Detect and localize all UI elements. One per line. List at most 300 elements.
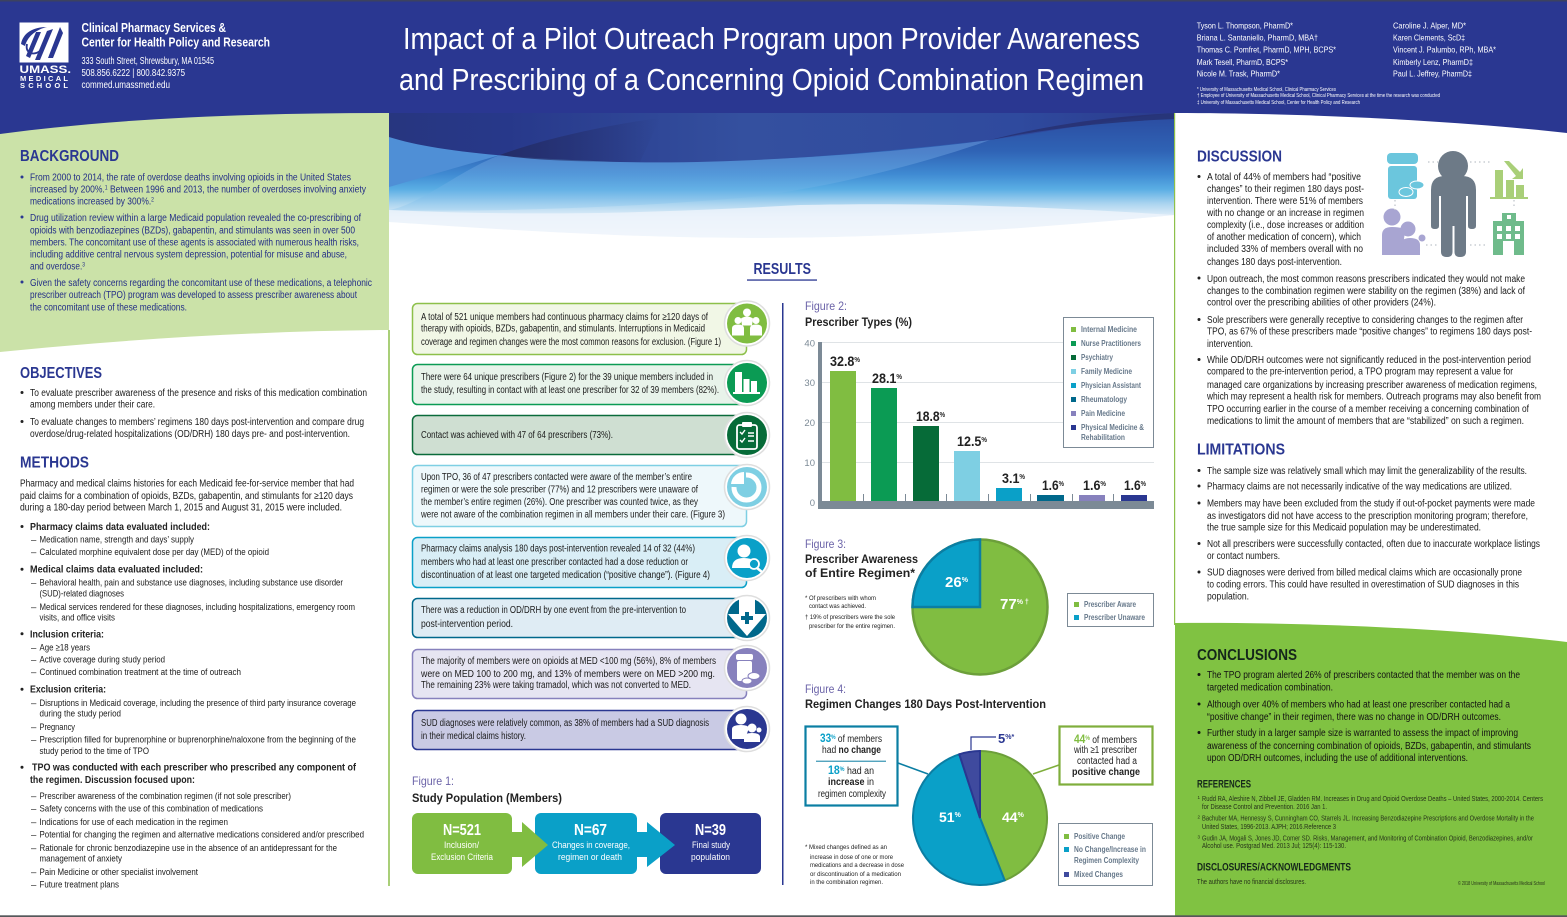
pie chart: 26 (945, 574, 962, 591)
figure 3 footnotes: * Of prescribers with whom (805, 595, 876, 602)
callout: no change or increase: of members (836, 734, 882, 745)
discussion bullets: changes 180 days post-intervention. (1207, 257, 1342, 268)
organisation and address: Clinical Pharmacy Services & (82, 21, 226, 35)
TPO discussion list: Future treatment plans (40, 880, 119, 891)
figure 4 footnote: in the combination regimen. (810, 879, 883, 886)
references: 3 (1198, 835, 1200, 840)
icon: pill bottle (724, 646, 770, 690)
methods intro: paid claims for a combination of opioids, BZDs, gabapentin, and stimulants for ≥120 days (20, 491, 353, 502)
authors: Caroline J. Alper, MD* (1393, 20, 1467, 30)
legend: regimen changes: No Change/Increase in (1074, 845, 1146, 854)
authors: † Employee of University of Massachusetts Medical School, Clinical Pharmacy Services at the time the research was conducted (1197, 93, 1440, 99)
flow box: N=67: Changes in coverage, (552, 840, 630, 851)
exclusion criteria list: Prescription filled for buprenorphine or buprenorphine/naloxone from the beginning of the (40, 735, 356, 746)
figure 4 heading (805, 682, 1046, 711)
figure 4 heading: Figure 4: (805, 682, 846, 696)
decorative wave band (389, 113, 1175, 246)
TPO discussion list: Prescriber awareness of the combination regimen (if not sole prescriber) (40, 791, 291, 802)
figure 3 footnotes (805, 595, 895, 630)
flow box: N=521 (412, 813, 548, 874)
discussion bullets: intervention. (1207, 339, 1253, 350)
figure 4 footnote: * Mixed changes defined as an (805, 844, 887, 851)
figure 1 heading (412, 774, 562, 805)
figure 2: prescriber types bar chart (804, 299, 1154, 509)
inclusion criteria list: – (31, 655, 37, 666)
flow box: N=39: Final study (692, 840, 730, 851)
disclosures: DISCLOSURES/ACKNOWLEDGMENTS (1197, 862, 1351, 874)
medical claims list (20, 565, 355, 624)
callout: positive change (1060, 726, 1152, 784)
flow box: N=39: population (691, 852, 730, 863)
TPO discussion list: Potential for changing the regimen and alternative medications considered and/or prescribed (40, 830, 364, 841)
bar value labels: 1.6 (1083, 477, 1102, 493)
background bullets: 2 (151, 198, 155, 204)
legend: prescriber types: Nurse Practitioners (1081, 339, 1141, 348)
TPO discussion list: Indications for use of each medication in the regimen (40, 817, 228, 828)
authors: Paul L. Jeffrey, PharmD‡ (1393, 69, 1472, 79)
discussion bullets: included 33% of members overall with no (1207, 244, 1363, 255)
figure 4 footnote: medications and a decrease in dose (810, 862, 904, 869)
methods intro: during a 180-day period between March 1, 2015 and August 31, 2015 were included. (20, 503, 342, 514)
bars (830, 371, 1147, 501)
exclusion criteria list: Exclusion criteria: (30, 685, 106, 696)
background bullets: 3 (82, 262, 86, 268)
result card 8 (412, 706, 770, 752)
bar value labels: % (1059, 481, 1065, 488)
authors: Karen Clements, ScD‡ (1393, 33, 1465, 43)
title (399, 21, 1144, 97)
limitations bullets: population. (1207, 592, 1249, 603)
callout: no change or increase (806, 726, 898, 806)
inclusion criteria list: Continued combination treatment at the time of outreach (40, 667, 241, 678)
figure 3 footnotes: † 19% of prescribers were the sole (805, 614, 895, 621)
pie chart: 77 (1000, 596, 1017, 613)
background bullets: and overdose. (30, 262, 93, 272)
medical claims list: (SUD)-related diagnoses (40, 589, 124, 600)
legend: prescriber types: Physical Medicine & (1081, 423, 1144, 432)
bar value labels: % (940, 412, 946, 419)
heading: objectives: OBJECTIVES (20, 365, 102, 382)
medical claims list: – (31, 602, 37, 613)
figure 4 footnote: or discontinuation of a medication (810, 871, 901, 878)
figure 2 heading (805, 299, 912, 329)
pie chart: % † (1017, 599, 1029, 606)
bar value labels: % (854, 357, 861, 364)
TPO discussion list: management of anxiety (40, 854, 122, 865)
icon: clipboard (724, 412, 770, 458)
discussion bullets: complexity (i.e., dose increases or addition (1207, 220, 1364, 231)
panel: methods (20, 454, 364, 891)
result card 3 (412, 412, 770, 458)
legend: awareness (1068, 594, 1154, 626)
panel: background (0, 113, 389, 352)
figure 1 heading: Figure 1: (412, 774, 454, 788)
TPO discussion list: – (31, 867, 37, 878)
icon: doctor and patient (724, 706, 770, 752)
objectives bullets: overdose/drug-related hospitalizations (OD/DRH) 180 days pre- and post-intervention. (30, 429, 350, 440)
authors: Vincent J. Palumbo, RPh, MBA* (1393, 45, 1497, 55)
legend: prescriber types: Rheumatology (1081, 395, 1127, 404)
callout: no change or increase: % (840, 767, 845, 773)
figure 3 footnotes: prescriber for the entire regimen. (809, 623, 895, 630)
discussion bullets (1198, 172, 1541, 427)
callout: positive change: of members (1090, 735, 1137, 746)
logo: UMASS. (20, 64, 71, 76)
legend: prescriber types (1064, 318, 1154, 448)
pie chart (913, 751, 1047, 885)
background bullets: increased by 200%. (30, 184, 118, 196)
authors: Tyson L. Thompson, PharmD* (1197, 20, 1294, 30)
TPO discussion list: – (31, 791, 37, 802)
result card 3: Contact was achieved with 47 of 64 prescribers (73%). (421, 430, 613, 441)
figure 4 footnote: increase in dose of one or more (810, 854, 893, 861)
TPO discussion list: Rationale for chronic benzodiazepine use in the absence of an antidepressant for the (40, 843, 337, 854)
result card 1: coverage and regimen changes were the most common reasons for exclusion. (Figure 1) (421, 337, 721, 348)
TPO discussion list: – (31, 830, 37, 841)
callout: no change or increase: had an (845, 766, 874, 777)
objectives bullets: To evaluate prescriber awareness of the presence and risks of this medication combination (30, 388, 367, 399)
limitations bullets (1198, 466, 1540, 603)
exclusion criteria list: – (31, 698, 37, 709)
bar value labels: % (896, 374, 903, 381)
legend: prescriber types: Psychiatry (1081, 353, 1113, 362)
background bullets (20, 172, 372, 314)
exclusion criteria list: study period to the time of TPO (40, 746, 149, 757)
result card 6: post-intervention period. (421, 619, 513, 630)
result card 8: in their medical claims history. (421, 731, 526, 742)
objectives bullets: To evaluate changes to members’ regimens 180 days post-intervention and compare drug (30, 417, 364, 428)
icon: bar chart (724, 360, 770, 406)
TPO discussion list: TPO was conducted with each prescriber who prescribed any component of (32, 763, 357, 774)
pharmacy claims list: – (31, 535, 37, 546)
references: 1 (1198, 795, 1200, 800)
figure 3: prescriber awareness pie (805, 537, 1154, 674)
medical claims list: – (31, 578, 37, 589)
figure 2 heading: Prescriber Types (%) (805, 315, 912, 329)
references: for Disease Control and Prevention. 2016 Jan 1. (1202, 804, 1327, 811)
pharmacy claims list: Pharmacy claims data evaluated included: (30, 522, 210, 533)
heading: conclusions: CONCLUSIONS (1197, 647, 1297, 664)
limitations bullets: Pharmacy claims are not necessarily indicative of the way medications are utilized. (1207, 482, 1512, 493)
authors: Kimberly Lenz, PharmD‡ (1393, 57, 1473, 67)
legend: regimen changes (1058, 824, 1152, 886)
callout: mixed changes (971, 731, 1014, 750)
organisation and address: commed.umassmed.edu (82, 80, 170, 91)
pie chart: % (955, 812, 962, 819)
result card 2: the study, resulting in contact with at least one prescriber for 32 of 39 members (82%). (421, 385, 719, 396)
authors: * University of Massachusetts Medical School, Clinical Pharmacy Services (1197, 87, 1336, 93)
references: REFERENCES (1197, 779, 1251, 791)
references: 2 (1198, 815, 1200, 820)
result card 1 (412, 301, 770, 354)
callout: no change or increase: had no change (822, 745, 881, 756)
limitations bullets: the true sample size for this Medicaid population may be underestimated. (1207, 523, 1481, 534)
background bullets: members. The concomitant use of these agents is associated with numerous health risks, (30, 238, 359, 248)
result card 4 (412, 464, 770, 526)
legend: regimen changes: Positive Change (1074, 832, 1125, 841)
bar value labels: 1.6 (1124, 477, 1143, 493)
flow box: N=521: Exclusion Criteria (431, 852, 494, 863)
background bullets: medications increased by 300%. (30, 196, 174, 208)
background bullets: including additive central nervous system depression, potential for misuse and abuse, (30, 250, 347, 260)
authors (1197, 20, 1497, 106)
legend: prescriber types: Physician Assistant (1081, 381, 1141, 390)
callout: no change or increase: regimen complexity (818, 789, 886, 800)
pie chart (912, 540, 1048, 674)
result card 4: regimen or were the sole prescriber (77%) and 12 prescribers were unaware of (421, 485, 698, 496)
logo: SCHOOL (20, 81, 68, 90)
authors: Nicole M. Trask, PharmD* (1197, 69, 1281, 79)
bar value labels: 32.8 (830, 353, 857, 369)
legend: awareness: Prescriber Aware (1084, 600, 1136, 609)
disclosures (1197, 862, 1351, 886)
result card 5: Pharmacy claims analysis 180 days post-intervention revealed 14 of 32 (44%) (421, 544, 695, 555)
legend: prescriber types: Rehabilitation (1081, 433, 1125, 442)
methods intro (20, 479, 354, 514)
callout: no change or increase: 33 (820, 731, 831, 745)
exclusion criteria list: – (31, 722, 37, 733)
medical claims list: Medical services rendered for these diagnoses, including hospitalizations, emergency room (40, 602, 355, 613)
header banner (0, 0, 1567, 136)
background bullets: Drug utilization review within a large Medicaid population revealed the co-prescribing of (30, 213, 361, 224)
TPO discussion list: Pain Medicine or other specialist involvement (40, 867, 198, 878)
discussion bullets: with no change or an increase in regimen (1206, 208, 1364, 219)
figure 4 footnote (805, 844, 904, 886)
title: Impact of a Pilot Outreach Program upon Provider Awareness (403, 21, 1140, 56)
result card 5: members who had at least one prescriber contacted had a dose reduction or (421, 557, 689, 568)
heading: results (747, 261, 817, 281)
background bullets: Given the safety concerns regarding the concomitant use of these medications, a telephonic (30, 278, 372, 289)
callout: positive change: 44 (1074, 732, 1086, 746)
legend: awareness: Prescriber Unaware (1084, 613, 1145, 622)
callout: no change or increase: % (831, 735, 836, 741)
heading: discussion: DISCUSSION (1197, 149, 1282, 166)
organisation and address: Center for Health Policy and Research (82, 36, 270, 50)
icon: people (724, 301, 770, 346)
y axis: 30 (804, 378, 815, 389)
bar value labels: 3.1 (1002, 470, 1021, 486)
icon: person with magnifier (724, 536, 770, 580)
conclusions bullets: “positive change” in their regimen, there was no change in OD/DRH outcomes. (1207, 712, 1501, 723)
medical claims list: Medical claims data evaluated included: (30, 565, 203, 576)
pie chart: 44 (1002, 809, 1018, 825)
flow box: N=67: regimen or death (558, 852, 622, 863)
results column divider (782, 303, 784, 885)
callout: positive change: positive change (1072, 767, 1140, 778)
pie chart: % (1018, 812, 1025, 819)
callout: no change or increase: 18 (828, 763, 840, 777)
conclusions bullets (1198, 670, 1531, 764)
heading: background: BACKGROUND (20, 148, 119, 165)
legend: prescriber types: Family Medicine (1081, 367, 1132, 376)
result card 4: Upon TPO, 36 of 47 prescribers contacted were aware of the member’s entire (421, 472, 692, 483)
discussion bullets: intervention. There were 51% of members (1207, 196, 1363, 207)
result card 1: A total of 521 unique members had continuous pharmacy claims for ≥120 days of (421, 312, 708, 323)
callout: positive change: % (1085, 736, 1090, 742)
authors: ‡ University of Massachusetts Medical School, Center for Health Policy and Research (1197, 100, 1360, 106)
result card 2 (412, 360, 770, 406)
logo: MEDICAL (20, 74, 68, 83)
left column border (388, 330, 390, 886)
legend: regimen changes: Regimen Complexity (1074, 856, 1139, 865)
pie chart: 51 (939, 809, 955, 825)
flow box: N=67: N=67 (574, 822, 607, 839)
figure 1: study population flow (412, 774, 761, 874)
references (1197, 779, 1543, 850)
illustration: patient care (1382, 151, 1528, 257)
conclusions bullets: Although over 40% of members who had at least one prescriber contacted had a (1207, 700, 1510, 711)
organisation and address: 333 South Street, Shrewsbury, MA 01545 (82, 56, 214, 67)
figure 3 footnotes: contact was achieved. (809, 603, 866, 610)
panel: discussion and limitations (1174, 113, 1567, 645)
result card 7 (412, 646, 770, 698)
result card 1: therapy with opioids, BZDs, gabapentin, and stimulants. Interruptions in Medicaid (421, 324, 705, 335)
pharmacy claims list: Calculated morphine equivalent dose per day (MED) of the opioid (40, 547, 269, 558)
conclusions bullets: upon OD/DRH outcomes, including the use of additional interventions. (1207, 753, 1468, 764)
background bullets: the concomitant use of these medications. (30, 302, 187, 314)
result card 5: discontinuation of at least one targeted medication (“positive change”). (Figure 4) (421, 570, 710, 581)
callout: positive change: contacted had a (1077, 756, 1137, 767)
result card 7: The majority of members were on opioids at MED <100 mg (56%), 8% of members (421, 656, 716, 667)
result card 6 (412, 596, 770, 640)
background bullets: From 2000 to 2014, the rate of overdose deaths involving opioids in the United States (30, 172, 351, 184)
legend: regimen changes: Mixed Changes (1074, 870, 1123, 879)
TPO discussion list: – (31, 817, 37, 828)
legend: prescriber types: Internal Medicine (1081, 325, 1137, 334)
result card 4: were not aware of the combination regimen in all members under their care. (Figure 3) (420, 510, 725, 521)
figure 3 heading (805, 537, 918, 580)
y axis: 10 (804, 458, 815, 469)
TPO discussion list (20, 763, 364, 891)
result card 7: The remaining 23% were taking tramadol, which was not converted to MED. (421, 680, 691, 691)
bar value labels: 18.8 (916, 408, 943, 424)
authors: Briana L. Santaniello, PharmD, MBA† (1197, 33, 1318, 43)
TPO discussion list: – (31, 804, 37, 815)
figure 3 heading: Figure 3: (805, 537, 846, 551)
legend: prescriber types: Pain Medicine (1081, 409, 1125, 418)
inclusion criteria list: Age ≥18 years (40, 643, 90, 654)
y axis: 0 (810, 498, 815, 509)
inclusion criteria list (20, 629, 241, 678)
icon: pie chart (724, 464, 770, 510)
result card 7: were on MED 100 to 200 mg, and 13% of members were on MED >200 mg. (420, 669, 715, 680)
callout: positive change: with ≥1 prescriber (1073, 745, 1138, 756)
flow box: N=67 (535, 813, 675, 874)
figure 4 heading: Regimen Changes 180 Days Post-Intervention (805, 697, 1046, 711)
exclusion criteria list: Pregnancy (40, 722, 75, 733)
flow box: N=39: N=39 (695, 822, 726, 839)
bar value labels: % (1019, 474, 1026, 481)
bar value labels: 12.5 (957, 433, 984, 449)
discussion bullets: changes” to their regimen 180 days post- (1207, 184, 1364, 195)
background bullets: prescriber outreach (TPO) program was developed to assess prescriber awareness about (30, 290, 357, 301)
conclusions bullets: Further study in a larger sample size is warranted to assess the impact of improving (1207, 728, 1518, 739)
discussion bullets: medications to limit the amount of members that are “stabilized” on such a regimen. (1207, 416, 1524, 427)
y axis (804, 338, 1154, 509)
bar value labels: 28.1 (872, 370, 899, 386)
bar value labels: % (1141, 481, 1147, 488)
TPO discussion list: Safety concerns with the use of this combination of medications (40, 804, 263, 815)
callout: no change or increase: increase in (828, 777, 874, 788)
logo (20, 22, 71, 90)
title: and Prescribing of a Concerning Opioid Combination Regimen (399, 62, 1144, 97)
limitations bullets: or contact numbers. (1207, 551, 1280, 562)
disclosures: The authors have no financial disclosures. (1197, 879, 1306, 886)
inclusion criteria list: – (31, 643, 37, 654)
figure 1 heading: Study Population (Members) (412, 791, 562, 805)
bar value labels (830, 353, 1147, 493)
inclusion criteria list: Inclusion criteria: (30, 629, 104, 640)
pharmacy claims list: Medication name, strength and days’ supply (40, 535, 194, 546)
background bullets: 1 (105, 186, 108, 192)
bar value labels: % (981, 437, 988, 444)
objectives bullets: among members under their care. (30, 400, 155, 411)
pharmacy claims list: – (31, 547, 37, 558)
exclusion criteria list: during the study period (40, 709, 121, 720)
background bullets: opioids with benzodiazepines (BZDs), gabapentin, and stimulants was seen in over 500 (30, 226, 355, 236)
medical claims list: visits, and office visits (40, 613, 115, 624)
references: United States, 1996-2013. AJPH; 2016.Reference 3 (1202, 824, 1336, 831)
heading: results: RESULTS (754, 261, 811, 278)
figure 2 heading: Figure 2: (805, 299, 847, 313)
flow box: N=39 (660, 813, 761, 874)
bar value labels: 1.6 (1042, 477, 1061, 493)
TPO discussion list: – (31, 843, 37, 854)
figure 3 heading: Prescriber Awareness (805, 552, 918, 566)
authors: Thomas C. Pomfret, PharmD, MPH, BCPS* (1197, 45, 1337, 55)
icon: down arrow with plus (724, 596, 770, 640)
background bullets: Between 1996 and 2013, the number of overdoses involving anxiety (108, 184, 366, 196)
result card 2: There were 64 unique prescribers (Figure 2) for the 39 unique members included in (421, 372, 713, 383)
discussion bullets: A total of 44% of members had “positive (1207, 172, 1361, 183)
exclusion criteria list (20, 685, 356, 757)
organisation and address (82, 21, 270, 91)
exclusion criteria list: Disruptions in Medicaid coverage, including the presence of third party insurance coverage (40, 698, 356, 709)
y axis: 20 (804, 418, 815, 429)
result card 8: SUD diagnoses were relatively common, as 38% of members had a SUD diagnosis (421, 718, 709, 729)
TPO discussion list: the regimen. Discussion focused upon: (30, 775, 195, 786)
discussion bullets: of another medication of concern), which (1207, 232, 1361, 243)
discussion bullets: control over the prescribing abilities of other providers (24%). (1207, 298, 1436, 309)
objectives bullets (20, 388, 367, 440)
figure 3 heading: of Entire Regimen* (805, 566, 915, 580)
figure 4: regimen changes pie (805, 682, 1152, 886)
heading: limitations: LIMITATIONS (1197, 442, 1285, 459)
flow box: N=521: Inclusion/ (444, 840, 479, 851)
exclusion criteria list: – (31, 735, 37, 746)
pharmacy claims list (20, 522, 269, 558)
heading: methods: METHODS (20, 454, 89, 472)
medical claims list: Behavioral health, pain and substance use diagnoses, including substance use disorder (40, 578, 344, 589)
discussion bullets: compared to the pre-intervention period, a TPO program may represent a value for (1207, 367, 1514, 378)
inclusion criteria list: Active coverage during study period (40, 655, 165, 666)
methods intro: Pharmacy and medical claims histories for each Medicaid fee-for-service member that had (20, 479, 354, 490)
callout: mixed changes: 5 (998, 731, 1005, 746)
authors: Mark Tesell, PharmD, BCPS* (1197, 57, 1289, 67)
references: Alcohol use. Postgrad Med. 2013 Jul; 125(4): 115-130. (1202, 843, 1346, 850)
conclusions bullets: targeted medication combination. (1207, 683, 1333, 694)
panel: objectives (20, 365, 367, 440)
pie chart: % (962, 577, 969, 584)
panel: conclusions (1175, 623, 1567, 917)
bar value labels: % (1100, 481, 1107, 488)
result card 4: the member’s entire regimen (26%). One prescriber was counted twice, as they (421, 497, 698, 508)
flow box: N=521: N=521 (443, 822, 481, 839)
inclusion criteria list: – (31, 667, 37, 678)
TPO discussion list: – (31, 880, 37, 891)
result card 5 (412, 536, 770, 588)
y axis: 40 (804, 338, 815, 350)
